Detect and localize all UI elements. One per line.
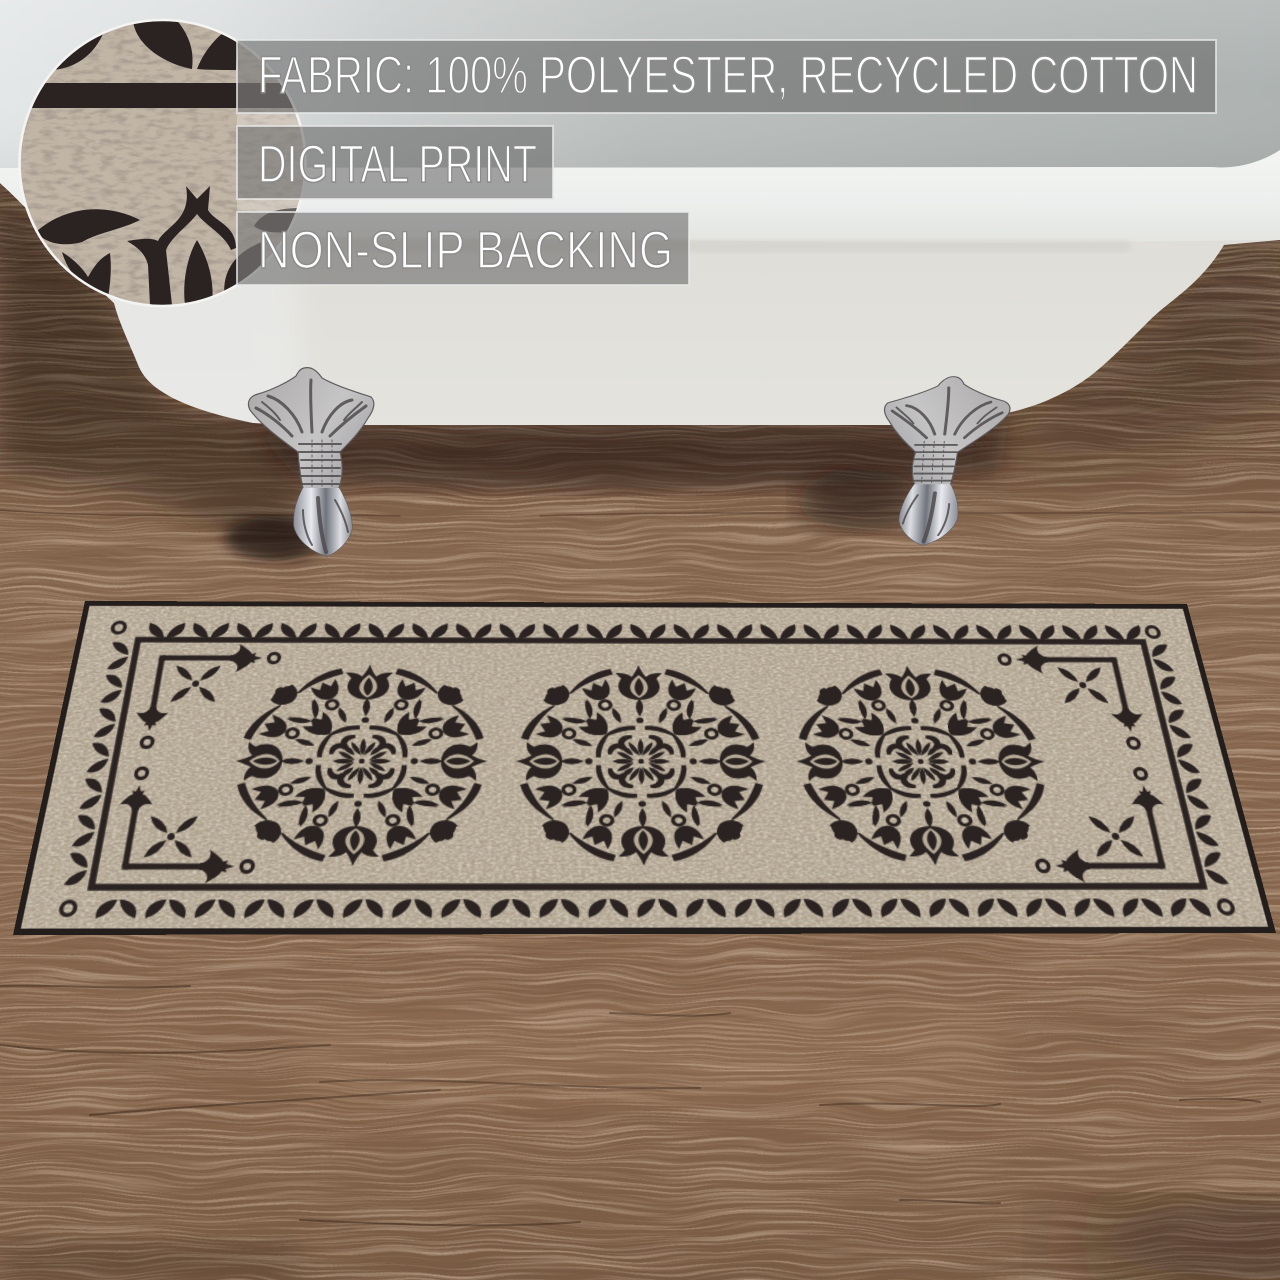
medallion centre xyxy=(513,665,774,866)
rug outer leaf border xyxy=(54,622,1238,918)
rug inner frame line xyxy=(91,640,1203,887)
rug xyxy=(13,601,1276,935)
magnified fabric circle xyxy=(15,15,317,315)
right claw foot xyxy=(876,377,1012,545)
fabric detail overlay xyxy=(18,18,1217,307)
corner brackets xyxy=(105,644,1183,884)
medallion right xyxy=(787,666,1065,866)
wall xyxy=(0,0,1280,172)
rug base xyxy=(15,602,1274,934)
label: non-slip backing xyxy=(237,212,689,285)
tub shadow on floor xyxy=(0,190,1280,560)
left claw foot xyxy=(248,368,374,556)
medallion left xyxy=(221,665,491,866)
label: non-slip backing: NON-SLIP BACKING xyxy=(258,221,673,280)
bathtub xyxy=(0,150,1280,430)
label: digital print xyxy=(237,126,553,199)
label: digital print: DIGITAL PRINT xyxy=(258,135,537,194)
